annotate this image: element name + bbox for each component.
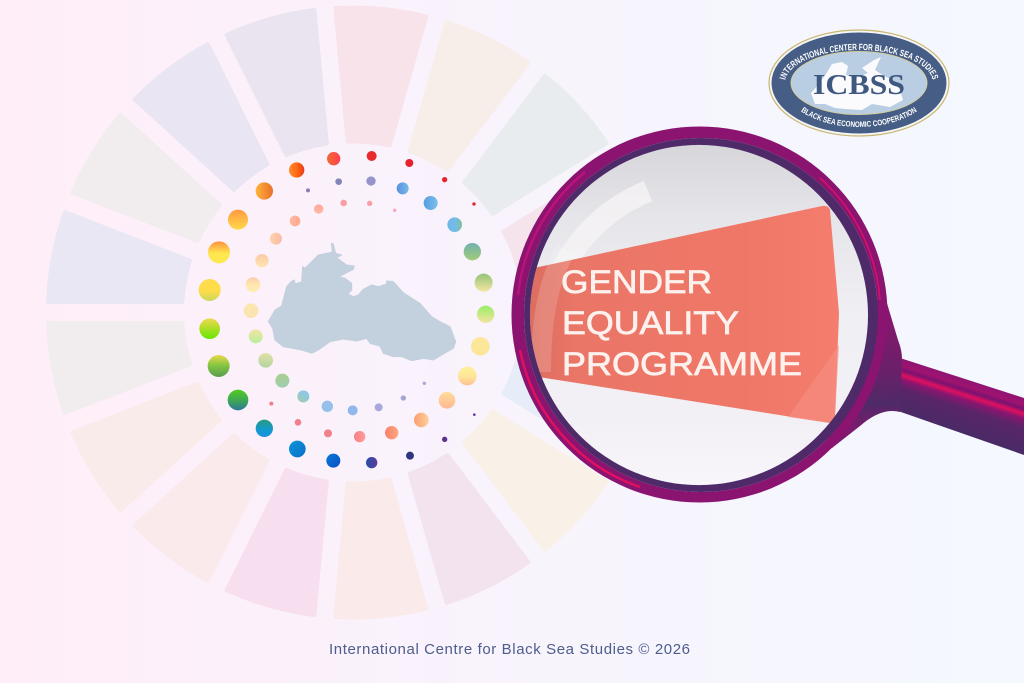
logo: ICBSS oval badge bbox=[768, 29, 950, 137]
heading: programme title: EQUALITY bbox=[562, 305, 739, 341]
heading: programme title: GENDER bbox=[561, 264, 712, 300]
footer credit: International Centre for Black Sea Studies © 2026 bbox=[329, 641, 690, 658]
logo arc text top: INTERNATIONAL CENTER FOR BLACK SEA STUDIES bbox=[779, 44, 938, 80]
map: Black Sea silhouette bbox=[268, 243, 456, 361]
logo arc text bottom: BLACK SEA ECONOMIC COOPERATION bbox=[801, 106, 917, 128]
lens contents: magnified wedge and title banner bbox=[520, 191, 839, 423]
magnifying glass bbox=[512, 126, 1024, 502]
heading: programme title: PROGRAMME bbox=[562, 346, 802, 382]
logo map bbox=[811, 57, 903, 110]
magnifier handle bbox=[760, 300, 1024, 455]
SDG wheel of pale wedges bbox=[45, 5, 654, 620]
lens glass bbox=[527, 142, 871, 488]
lens rim bbox=[512, 126, 888, 502]
heading: programme title bbox=[561, 264, 802, 382]
logo wordmark: ICBSS bbox=[813, 69, 905, 101]
spiral ring of coloured dots with Black Sea map bbox=[199, 151, 494, 468]
